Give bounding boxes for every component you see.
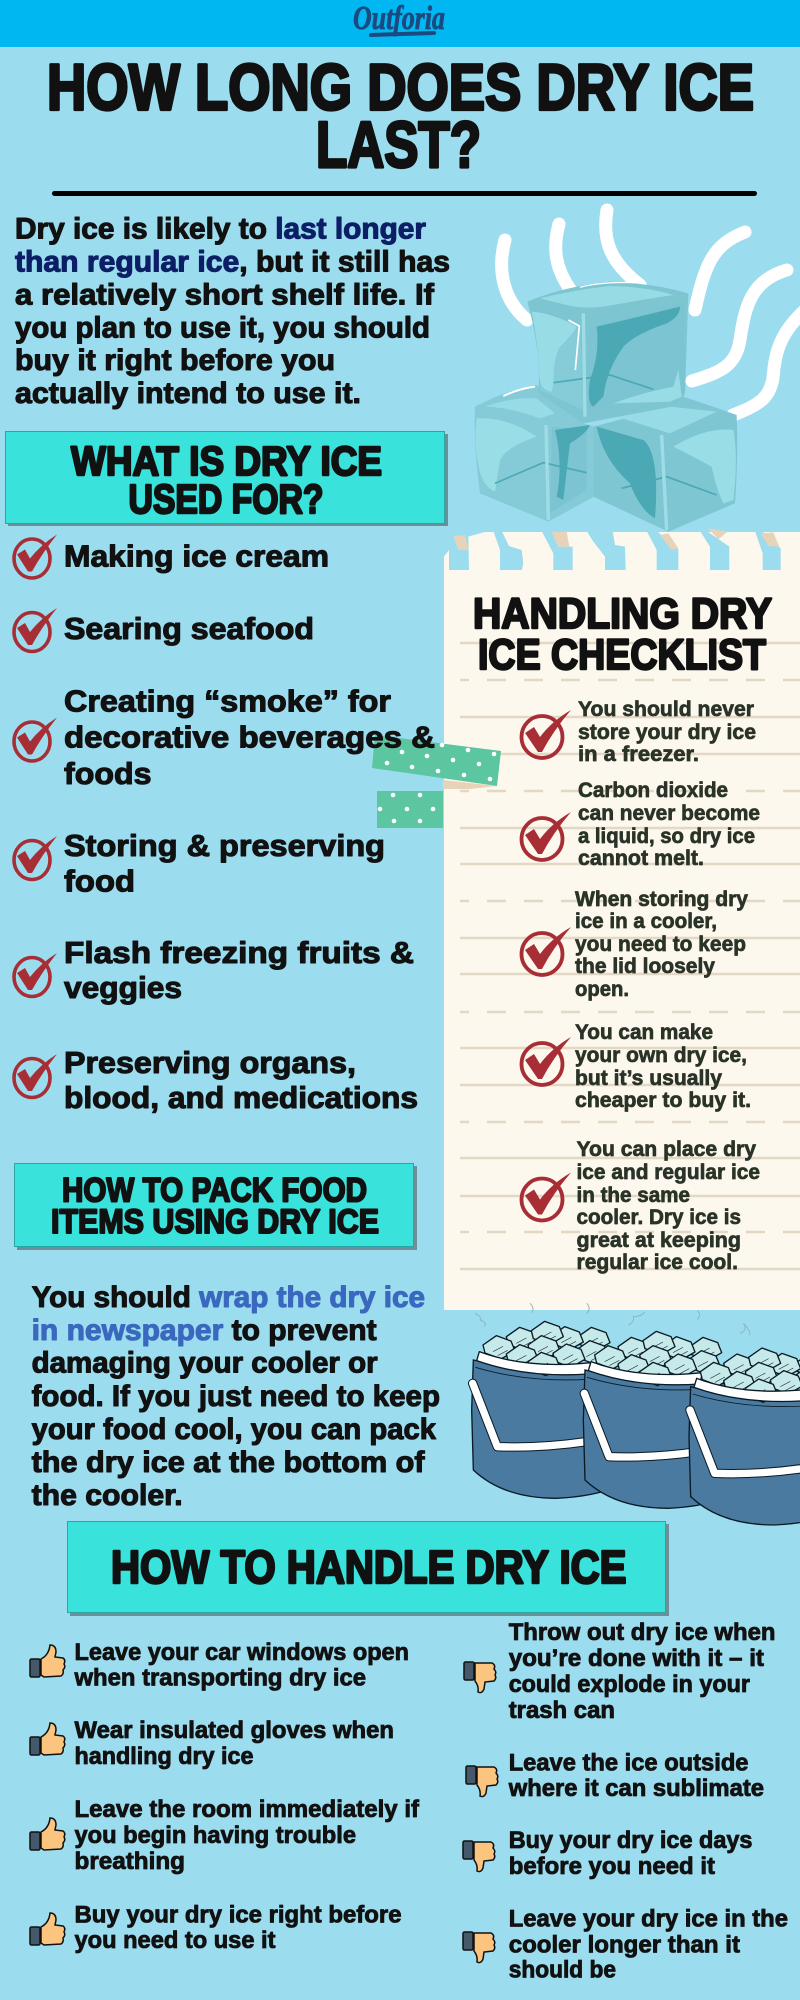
list: don't (463, 1619, 788, 1984)
packing paragraph: You should wrap the dry ice (32, 1281, 425, 1314)
checklist heading: ICE CHECKLIST (478, 631, 766, 679)
do item 4: Buy your dry ice right before (74, 1902, 402, 1929)
paper sheet (440, 528, 800, 1310)
use: searing seafood: Searing seafood (64, 611, 314, 646)
checklist item 3: you need to keep (575, 932, 746, 956)
steam squiggles (475, 1303, 750, 1335)
packing paragraph: the cooler. (32, 1479, 183, 1512)
use: creating smoke: Creating “smoke” for (64, 684, 391, 719)
checklist item 5: regular ice cool. (576, 1250, 738, 1274)
checklist item 2: can never become (578, 801, 760, 825)
intro paragraph: a relatively short shelf life. If (15, 278, 435, 312)
checklist item 3: ice in a cooler, (575, 909, 717, 933)
use: preserving organs: blood, and medications (64, 1080, 418, 1115)
heading box: how to handle dry ice: HOW TO HANDLE DRY ICE (111, 1541, 626, 1593)
checklist item 5 (522, 1137, 760, 1274)
use: flash freezing: Flash freezing fruits & (64, 935, 414, 970)
cooler 3 (689, 1348, 800, 1525)
ice cube: bottom right (593, 397, 737, 532)
heading box: what is dry ice used for: USED FOR? (128, 476, 324, 522)
list: dry ice uses (14, 534, 435, 1115)
don't item 1 (464, 1619, 776, 1724)
use: creating smoke (14, 684, 435, 791)
checklist heading: HANDLING DRY (473, 590, 772, 638)
logo: Outforia: Outforia (353, 0, 445, 37)
washi tape (372, 735, 501, 828)
packing paragraph: the dry ice at the bottom of (32, 1446, 426, 1479)
checklist item 3: When storing dry (575, 887, 748, 911)
packing paragraph: your food cool, you can pack (32, 1413, 436, 1446)
checklist item 4 (522, 1020, 751, 1112)
title: LAST? (316, 108, 481, 181)
checklist item 2: a liquid, so dry ice (578, 824, 755, 848)
don't item 3: before you need it (509, 1853, 715, 1880)
use: preserving organs: Preserving organs, (64, 1045, 356, 1080)
checklist item 5: great at keeping (576, 1228, 741, 1252)
do item 4: you need to use it (74, 1927, 276, 1954)
don't item 4: cooler longer than it (509, 1932, 740, 1959)
checklist item 5: ice and regular ice (576, 1160, 760, 1184)
packing paragraph: in newspaper to prevent (32, 1314, 377, 1347)
don't item 3: Buy your dry ice days (509, 1827, 752, 1854)
do item 3 (30, 1796, 420, 1875)
use: flash freezing: veggies (64, 970, 182, 1005)
do item 3: you begin having trouble (74, 1822, 356, 1849)
checklist item 2 (522, 778, 760, 870)
panel: handling dry ice checklist (440, 528, 800, 1310)
do item 1: when transporting dry ice (74, 1665, 366, 1692)
do item 2: handling dry ice (74, 1743, 254, 1770)
title rule (52, 191, 757, 196)
checklist item 4: cheaper to buy it. (575, 1088, 751, 1112)
heading box: what is dry ice used for: WHAT IS DRY ICE (71, 438, 382, 484)
do item 1: Leave your car windows open (74, 1639, 409, 1666)
do item 3: Leave the room immediately if (74, 1796, 420, 1823)
heading box: how to pack food: HOW TO PACK FOOD (62, 1172, 367, 1210)
packing paragraph: damaging your cooler or (32, 1347, 378, 1380)
don't item 4: should be (509, 1957, 616, 1984)
don't item 2: Leave the ice outside (509, 1750, 748, 1777)
checklist item 2: Carbon dioxide (578, 778, 728, 802)
don't item 3 (463, 1827, 752, 1880)
packing paragraph (32, 1281, 440, 1512)
use: making ice cream: Making ice cream (64, 539, 329, 574)
do item 3: breathing (74, 1848, 185, 1875)
heading box: how to pack food: ITEMS USING DRY ICE (51, 1203, 379, 1241)
intro paragraph: you plan to use it, you should (15, 312, 430, 344)
checklist item 5: cooler. Dry ice is (576, 1205, 741, 1229)
do item 4 (30, 1902, 402, 1954)
don't item 1: Throw out dry ice when (509, 1619, 776, 1646)
title (47, 50, 754, 181)
use: storing and preserving: Storing & preserving (64, 828, 385, 863)
do item 2: Wear insulated gloves when (74, 1717, 394, 1744)
checklist item 1: in a freezer. (578, 742, 699, 766)
header bar with logo (0, 0, 800, 47)
use: creating smoke: foods (64, 756, 152, 791)
heading box: how to pack food (14, 1164, 417, 1250)
intro paragraph: actually intend to use it. (15, 377, 361, 410)
checklist item 2: cannot melt. (578, 846, 704, 870)
ice cube: bottom left (475, 385, 594, 522)
checklist item 3: the lid loosely (575, 954, 715, 978)
checklist item 3: open. (575, 977, 629, 1001)
intro paragraph: buy it right before you (15, 344, 335, 377)
checklist item 5: in the same (576, 1183, 690, 1207)
checklist item 5: You can place dry (576, 1137, 756, 1161)
heading box: how to handle dry ice (68, 1522, 669, 1616)
don't item 1: trash can (509, 1697, 615, 1724)
don't item 1: you’re done with it – it (509, 1645, 764, 1672)
don't item 4 (463, 1906, 788, 1984)
checklist item 4: You can make (575, 1020, 713, 1044)
use: storing and preserving: food (64, 864, 135, 899)
checklist item 4: your own dry ice, (575, 1043, 747, 1067)
illustration: coolers full of dry ice (472, 1303, 800, 1525)
heading box: what is dry ice used for (6, 432, 448, 526)
cooler 1 (472, 1321, 617, 1498)
don't item 2 (466, 1750, 764, 1802)
checklist item 3 (522, 887, 748, 1001)
checklist item 1: You should never (578, 697, 755, 721)
packing paragraph: food. If you just need to keep (32, 1380, 440, 1413)
checklist heading (473, 590, 772, 679)
do item 2 (30, 1717, 394, 1770)
use: flash freezing (14, 935, 414, 1005)
don't item 2: where it can sublimate (508, 1775, 764, 1802)
use: searing seafood (14, 608, 314, 652)
use: storing and preserving (14, 828, 385, 899)
use: making ice cream (14, 534, 329, 578)
use: creating smoke: decorative beverages & (64, 720, 435, 755)
list: do (30, 1639, 420, 1954)
intro paragraph: Dry ice is likely to last longer (15, 213, 426, 246)
intro paragraph (15, 213, 450, 410)
don't item 1: could explode in your (509, 1671, 750, 1698)
don't item 4: Leave your dry ice in the (509, 1906, 788, 1933)
checklist item 1 (522, 697, 756, 766)
do item 1 (30, 1639, 409, 1692)
intro paragraph: than regular ice, but it still has (15, 246, 450, 278)
checklist item 1: store your dry ice (578, 720, 756, 744)
ice cube: top (527, 282, 688, 423)
cooler 2 (583, 1331, 728, 1508)
checklist item 4: but it’s usually (575, 1066, 722, 1090)
steam wisps (502, 210, 800, 415)
illustration: ice cubes (475, 282, 737, 532)
use: preserving organs (14, 1045, 418, 1115)
